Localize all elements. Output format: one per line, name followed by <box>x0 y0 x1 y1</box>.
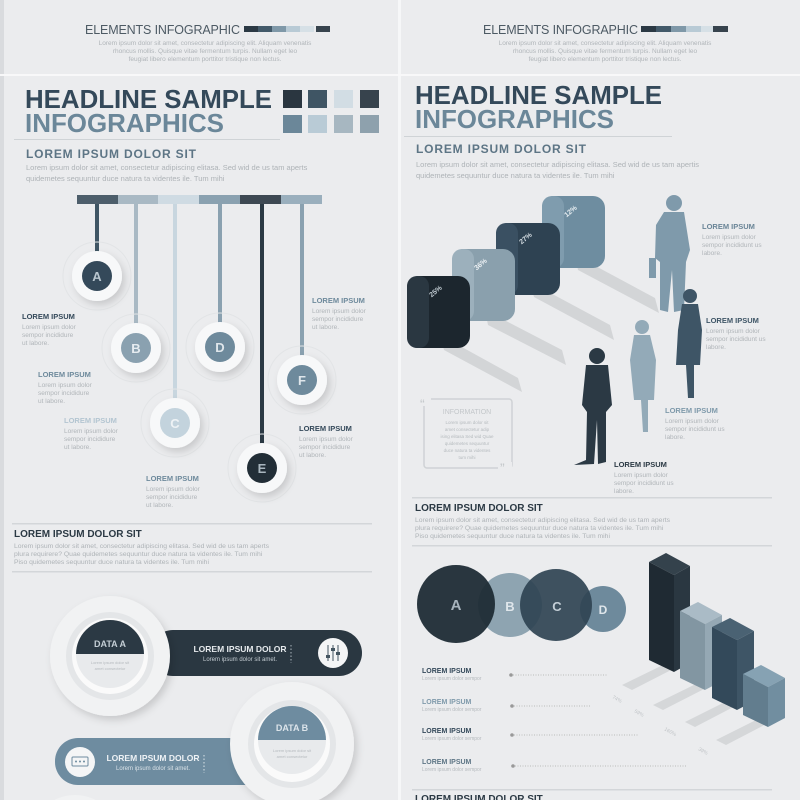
information box: quidemetes sequuntur <box>445 441 490 446</box>
node A: A <box>92 269 102 284</box>
icon: chat <box>65 747 95 777</box>
person labels: labore. <box>665 434 685 441</box>
headline left: HEADLINE SAMPLE <box>25 84 272 114</box>
person labels: sempor incididunt us <box>706 336 766 343</box>
section right bottom: Lorem ipsum dolor sit amet, consectetur adipiscing elitasa. Sed wid de us tam aperts <box>415 517 671 524</box>
3d bar chart: 59% <box>633 709 645 719</box>
data B: LOREM IPSUM DOLOR <box>106 753 200 763</box>
section left bottom: Piso quidemetes sequuntur duce natura ta videntes ile. Tum mihi <box>14 559 209 566</box>
section left bottom: LOREM IPSUM DOLOR SIT <box>14 529 142 540</box>
person labels: Lorem ipsum dolor <box>702 234 757 241</box>
section left bottom: Lorem ipsum dolor sit amet, consectetur adipiscing elitasa. Sed wid de us tam aperts <box>14 543 270 550</box>
person labels: LOREM IPSUM <box>702 222 755 231</box>
person labels: LOREM IPSUM <box>665 406 718 415</box>
person labels: Lorem ipsum dolor <box>706 328 761 335</box>
information box: “ <box>420 396 425 412</box>
subtitle left: LOREM IPSUM DOLOR SIT <box>26 147 197 161</box>
section left bottom: plura requirere? Quae quidemetes sequuntur duce natura ta videntes ile. Tum mihi <box>14 551 263 558</box>
cube 25%: 25% <box>428 284 444 299</box>
cube 12% <box>542 196 605 268</box>
data B: amet consectetur <box>277 754 308 759</box>
subtitle left <box>26 147 308 183</box>
section left bottom <box>12 523 372 572</box>
pendulum labels: sempor incididure <box>146 494 198 501</box>
headline right <box>416 86 661 128</box>
data A: LOREM IPSUM DOLOR <box>193 644 287 654</box>
person labels: sempor incididunt us <box>665 426 725 433</box>
person labels: Lorem ipsum dolor <box>665 418 720 425</box>
list rows: LOREM IPSUM <box>422 728 472 735</box>
pendulum labels: sempor incididure <box>38 390 90 397</box>
subtitle left: Lorem ipsum dolor sit amet, consectetur adipiscing elitasa. Sed wid de us tam aperts <box>26 163 308 172</box>
subtitle right <box>416 142 699 180</box>
3d bar chart: 160% <box>663 727 678 738</box>
bar 1 <box>649 553 690 672</box>
pendulum labels: Lorem ipsum dolor <box>146 486 201 493</box>
pendulum labels: ut labore. <box>38 398 65 405</box>
person labels: labore. <box>614 488 634 495</box>
data B <box>55 682 354 800</box>
cube 25% <box>407 276 470 348</box>
pendulum chart <box>63 195 336 502</box>
node C <box>141 389 209 457</box>
venn circles: D <box>599 603 608 617</box>
pendulum labels: Lorem ipsum dolor <box>22 324 77 331</box>
person labels: LOREM IPSUM <box>614 460 667 469</box>
cube chart <box>407 196 659 392</box>
bar 3 <box>712 618 754 710</box>
subtitle right: Lorem ipsum dolor sit amet, consectetur adipiscing elitasa. Sed wid de us tam apertis <box>416 160 699 169</box>
node E: E <box>258 461 267 476</box>
section right bottom <box>412 497 772 546</box>
headline left <box>26 90 271 132</box>
venn circles <box>417 565 626 643</box>
pendulum labels: LOREM IPSUM <box>64 416 117 425</box>
pendulum labels: ut labore. <box>64 444 91 451</box>
section right bottom: LOREM IPSUM DOLOR SIT <box>415 503 543 514</box>
list rows: Lorem ipsum dolor sempor <box>422 767 482 773</box>
list rows: LOREM IPSUM <box>422 699 472 706</box>
pendulum labels: LOREM IPSUM <box>312 296 365 305</box>
node E <box>228 434 296 502</box>
3d bar chart <box>611 553 785 757</box>
information box: amet consectetur adip <box>445 427 490 432</box>
data B: DATA B <box>276 723 309 733</box>
data A: amet consectetur <box>95 666 126 671</box>
header right: ELEMENTS INFOGRAPHIC <box>483 23 638 37</box>
pendulum labels: sempor incididure <box>64 436 116 443</box>
node D <box>186 313 254 381</box>
header right: rhoncus mollis. Quisque vitae fermentum turpis. Nullam eget leo <box>513 48 698 55</box>
pendulum labels: LOREM IPSUM <box>38 370 91 379</box>
header left: rhoncus mollis. Quisque vitae fermentum turpis. Nullam eget leo <box>113 48 298 55</box>
icon: sliders <box>318 638 348 668</box>
node B <box>102 314 170 382</box>
pendulum labels: sempor incididure <box>22 332 74 339</box>
headline left: INFOGRAPHICS <box>25 108 224 138</box>
pendulum labels: ut labore. <box>312 324 339 331</box>
information box: Lorem ipsum dolor sit <box>445 420 489 425</box>
pendulum labels: ut labore. <box>22 340 49 347</box>
pendulum labels: sempor incididure <box>312 316 364 323</box>
venn circles: C <box>552 599 562 614</box>
header left: feugiat libero elementum porttitor tristique non lectus. <box>129 56 282 63</box>
subtitle right: quidemetes sequuntur duce natura ta videntes ile. Tum mihi <box>416 171 615 180</box>
data B: Lorem ipsum dolor sit amet. <box>116 766 190 772</box>
list rows: Lorem ipsum dolor sempor <box>422 676 482 682</box>
pendulum labels: sempor incididure <box>299 444 351 451</box>
person labels: labore. <box>702 250 722 257</box>
pendulum labels: Lorem ipsum dolor <box>299 436 354 443</box>
person 4 <box>574 348 612 465</box>
person 3 <box>630 320 656 432</box>
header left <box>85 23 330 63</box>
pendulum labels: ut labore. <box>299 452 326 459</box>
list rows: LOREM IPSUM <box>422 759 472 766</box>
list rows: LOREM IPSUM <box>422 668 472 675</box>
list rows: Lorem ipsum dolor sempor <box>422 736 482 742</box>
pendulum labels: LOREM IPSUM <box>22 312 75 321</box>
node B: B <box>131 341 141 356</box>
person labels: Lorem ipsum dolor <box>614 472 669 479</box>
headline right: INFOGRAPHICS <box>415 104 614 134</box>
pendulum labels: Lorem ipsum dolor <box>64 428 119 435</box>
node D: D <box>215 340 225 355</box>
silhouettes <box>574 195 702 465</box>
header right: feugiat libero elementum porttitor tristique non lectus. <box>529 56 682 63</box>
information box: ising elitasa Sed wid Quae <box>440 434 494 439</box>
bar 2 <box>680 602 722 690</box>
section right bottom: Piso quidemetes sequuntur duce natura ta videntes ile. Tum mihi <box>415 533 610 540</box>
information box: duce natura ta videntes <box>444 448 491 453</box>
subtitle left: quidemetes sequuntur duce natura ta videntes ile. Tum mihi <box>26 174 225 183</box>
node F <box>268 346 336 414</box>
swatches <box>283 90 379 133</box>
person 2 <box>676 289 702 398</box>
cube 36%: 36% <box>473 257 489 272</box>
person labels: sempor incididunt us <box>702 242 762 249</box>
list rows: Lorem ipsum dolor sempor <box>422 707 482 713</box>
cube 12%: 12% <box>563 204 579 219</box>
3d bar chart: 74% <box>611 695 623 705</box>
person labels <box>614 222 766 495</box>
header left: ELEMENTS INFOGRAPHIC <box>85 23 240 37</box>
headline right: HEADLINE SAMPLE <box>415 80 662 110</box>
information box: ” <box>500 460 505 476</box>
venn circles: A <box>451 597 462 614</box>
person labels: sempor incididunt us <box>614 480 674 487</box>
node A <box>63 242 131 310</box>
cube 27%: 27% <box>518 231 534 246</box>
header left: Lorem ipsum dolor sit amet, consectetur adipiscing elit. Aliquam venenatis <box>99 40 312 47</box>
list rows <box>422 668 686 773</box>
data A: Lorem ipsum dolor sit amet. <box>203 657 277 663</box>
venn circles: B <box>505 599 515 614</box>
person labels: labore. <box>706 344 726 351</box>
bar 4 <box>743 665 785 727</box>
pendulum labels: Lorem ipsum dolor <box>38 382 93 389</box>
person labels: LOREM IPSUM <box>706 316 759 325</box>
node F: F <box>298 373 306 388</box>
cube 36% <box>452 249 515 321</box>
section right bottom: plura requirere? Quae quidemetes sequuntur duce natura ta videntes ile. Tum mihi <box>415 525 664 532</box>
pendulum labels: Lorem ipsum dolor <box>312 308 367 315</box>
cube 27% <box>496 223 560 295</box>
pendulum labels <box>22 296 367 509</box>
header right: Lorem ipsum dolor sit amet, consectetur adipiscing elit. Aliquam venenatis <box>499 40 712 47</box>
information box: tum mihi <box>458 455 476 460</box>
pendulum labels: LOREM IPSUM <box>146 474 199 483</box>
node C: C <box>170 416 180 431</box>
information box <box>420 398 513 469</box>
data A: Lorem ipsum dolor sit <box>91 660 130 665</box>
data B: Lorem ipsum dolor sit <box>273 748 312 753</box>
pendulum labels: LOREM IPSUM <box>299 424 352 433</box>
data A: DATA A <box>94 639 126 649</box>
header right <box>483 23 728 63</box>
pendulum labels: ut labore. <box>146 502 173 509</box>
subtitle right: LOREM IPSUM DOLOR SIT <box>416 142 587 156</box>
information box: INFORMATION <box>443 409 491 416</box>
person 1 <box>649 195 690 312</box>
data A <box>50 596 362 716</box>
3d bar chart: 39% <box>697 747 709 757</box>
